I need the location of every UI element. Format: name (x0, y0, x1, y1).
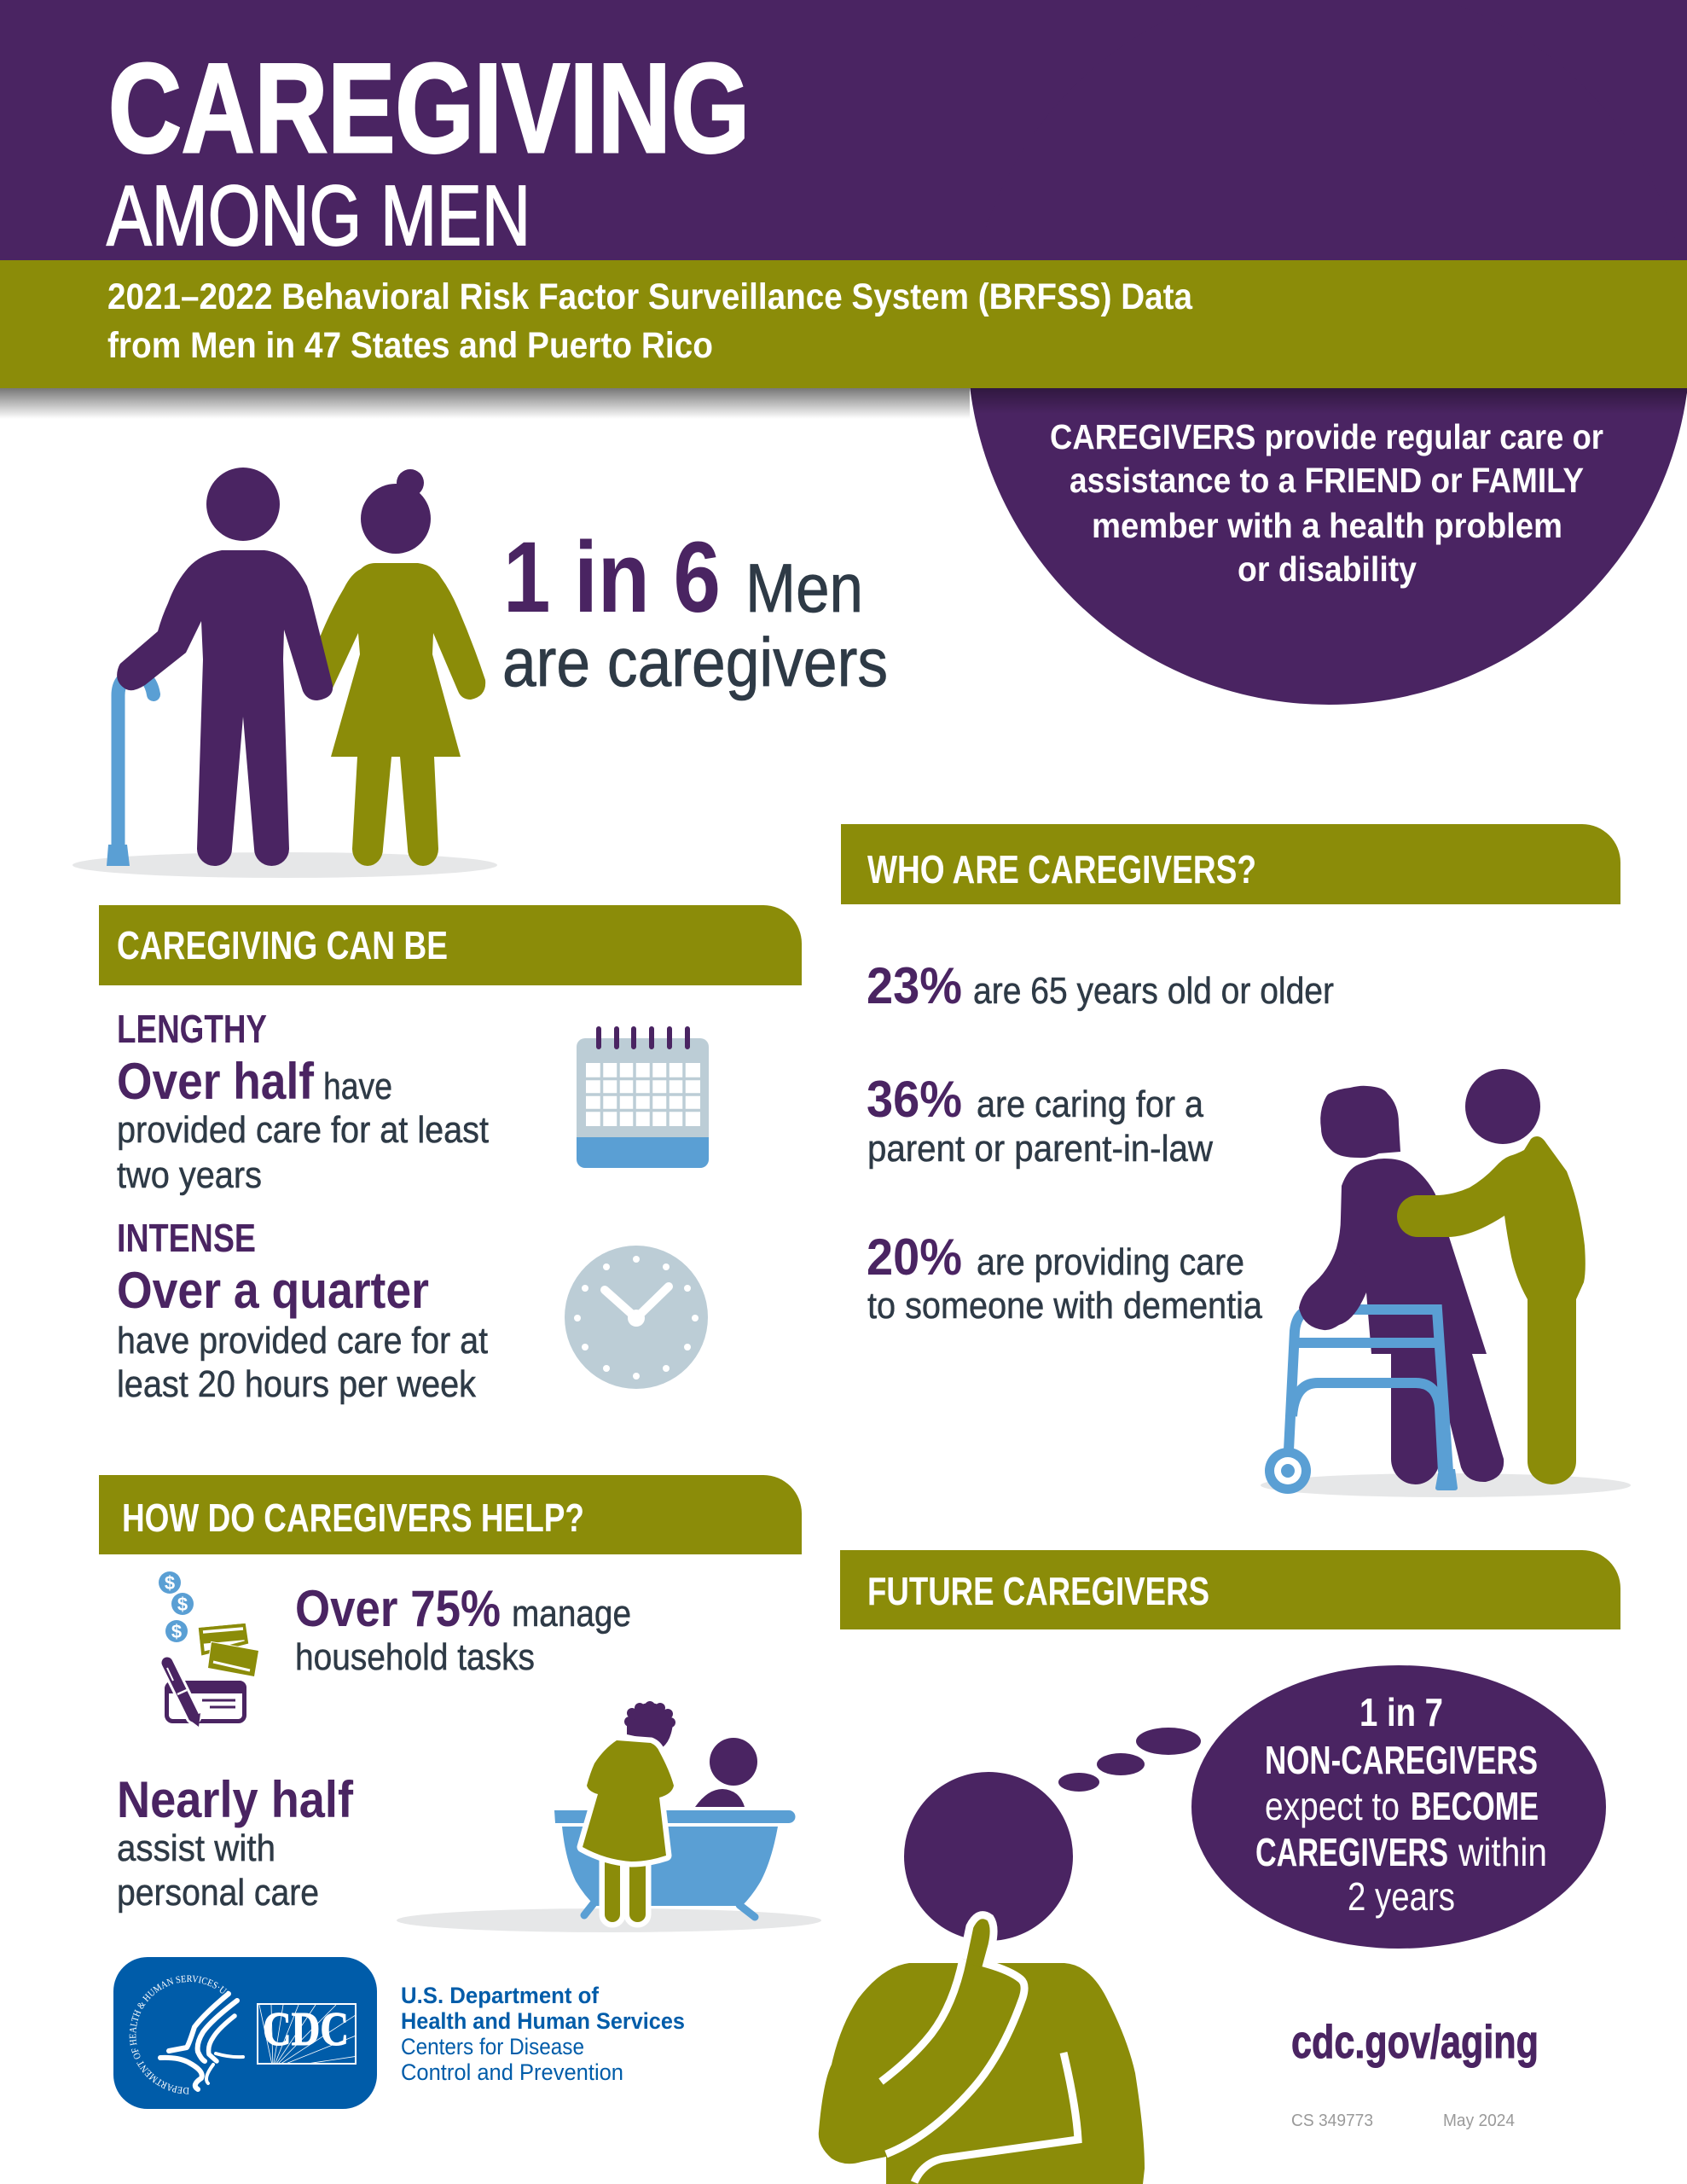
statistic: 36 percent (867, 1071, 1213, 1170)
text block: household tasks: Over 75% (295, 1580, 501, 1637)
statistic: 1 in 6 men: are caregivers (502, 624, 888, 701)
text block: household tasks: manage (512, 1593, 631, 1635)
statistic: 20 percent (867, 1228, 1262, 1327)
thought bubble: 1 in 7 (1359, 1690, 1443, 1734)
statistic: 23 percent: are 65 years old or older (973, 970, 1334, 1012)
icon: older couple with cane (72, 468, 497, 878)
text block: agency name: Centers for Disease (401, 2034, 584, 2059)
statistic: 20 percent: are providing care (977, 1241, 1244, 1283)
icon: clock (565, 1246, 708, 1389)
CDC mark: CDC (263, 2003, 349, 2056)
callout: caregiver definition: assistance to a FRIEND or FAMILY (1070, 461, 1584, 500)
text block: agency name: Control and Prevention (401, 2059, 623, 2085)
statistic: 36 percent: parent or parent-in-law (867, 1128, 1213, 1170)
text block: intense: INTENSE (117, 1216, 256, 1260)
icon: eagle (160, 1994, 243, 2089)
icon: bills, cards and checkbook: $ (177, 1594, 188, 1615)
statistic: 36 percent: are caring for a (977, 1083, 1203, 1125)
text block: household tasks: household tasks (295, 1636, 535, 1678)
text block: household tasks (295, 1580, 631, 1678)
text block: intense: least 20 hours per week (117, 1363, 477, 1405)
text block: personal care (117, 1771, 354, 1914)
icon: bills, cards and checkbook (159, 1571, 258, 1727)
publication code and date: May 2024 (1443, 2111, 1515, 2130)
text block: personal care: Nearly half (117, 1771, 354, 1828)
subtitle: AMONG MEN (107, 168, 530, 264)
statistic: 20 percent: 20% (867, 1228, 962, 1286)
heading: CAREGIVING CAN BE (117, 923, 448, 967)
text block: personal care: assist with (117, 1827, 275, 1869)
panel: future caregivers (819, 1550, 1620, 2184)
text block: lengthy: Over half (117, 1053, 315, 1110)
publication code and date (1291, 2111, 1515, 2130)
heading (841, 824, 1620, 904)
text block: lengthy: LENGTHY (117, 1007, 267, 1051)
publication code and date: CS 349773 (1291, 2111, 1373, 2130)
text block: intense: Over a quarter (117, 1262, 429, 1319)
heading (840, 1550, 1620, 1629)
text block: lengthy: have (323, 1066, 392, 1107)
icon: calendar (577, 1029, 709, 1168)
panel: how do caregivers help (99, 1475, 821, 1932)
thought bubble: CAREGIVERS (1255, 1830, 1448, 1874)
text block: lengthy: provided care for at least (117, 1109, 489, 1151)
icon: caregiver helping person with walker (1261, 1069, 1631, 1497)
heading: HOW DO CAREGIVERS HELP? (122, 1496, 584, 1540)
panel: caregiving can be (99, 905, 802, 1405)
heading (99, 905, 802, 985)
text block: agency name: U.S. Department of (401, 1983, 600, 2008)
data source band (0, 260, 1687, 388)
text block: agency name (401, 1983, 685, 2085)
text block: agency name: Health and Human Services (401, 2008, 685, 2034)
icon: bills, cards and checkbook: $ (165, 1572, 175, 1594)
icon: helping person in bathtub (397, 1701, 821, 1932)
thought bubble: 2 years (1348, 1874, 1455, 1919)
shadow below header (0, 388, 970, 419)
statistic: 20 percent: to someone with dementia (867, 1285, 1262, 1327)
statistic: 1 in 6 men (502, 521, 888, 701)
data source band: from Men in 47 States and Puerto Rico (107, 325, 713, 366)
heading (99, 1475, 802, 1554)
panel: who are caregivers (841, 824, 1631, 1497)
icon: bills, cards and checkbook: $ (171, 1621, 182, 1642)
thought bubble: expect to (1265, 1784, 1400, 1828)
statistic: 36 percent: 36% (867, 1071, 962, 1128)
link: cdc.gov/aging: cdc.gov/aging (1291, 2015, 1539, 2068)
statistic: 1 in 6 men: 1 in 6 (503, 521, 721, 634)
header band (0, 0, 1687, 264)
heading: FUTURE CAREGIVERS (867, 1569, 1209, 1613)
icon: thinking person (819, 1772, 1145, 2184)
thought bubble: BECOME (1411, 1784, 1539, 1828)
thought bubble: NON-CAREGIVERS (1265, 1738, 1538, 1782)
seal text: DEPARTMENT OF HEALTH & HUMAN SERVICES·USA (130, 1976, 230, 2094)
callout: caregiver definition: member with a health problem (1092, 506, 1562, 545)
thought bubble: within (1458, 1830, 1547, 1874)
callout: caregiver definition: or disability (1238, 549, 1417, 589)
text block: lengthy (117, 1007, 489, 1196)
statistic: 1 in 6 men: Men (745, 550, 863, 627)
text block: intense: have provided care for at (117, 1320, 488, 1362)
heading: WHO ARE CAREGIVERS? (867, 847, 1256, 892)
logo: HHS CDC (113, 1957, 377, 2109)
text block: personal care: personal care (117, 1872, 319, 1914)
text block: lengthy: two years (117, 1154, 262, 1196)
data source band: 2021–2022 Behavioral Risk Factor Surveillance System (BRFSS) Data (107, 276, 1193, 317)
callout: caregiver definition: CAREGIVERS provide regular care or (1050, 417, 1603, 456)
text block: intense (117, 1216, 488, 1405)
statistic: 23 percent: 23% (867, 957, 962, 1014)
title: CAREGIVING (108, 37, 750, 179)
statistic: 23 percent (867, 957, 1334, 1014)
thought bubble (1058, 1665, 1606, 1949)
callout: caregiver definition (970, 388, 1687, 705)
